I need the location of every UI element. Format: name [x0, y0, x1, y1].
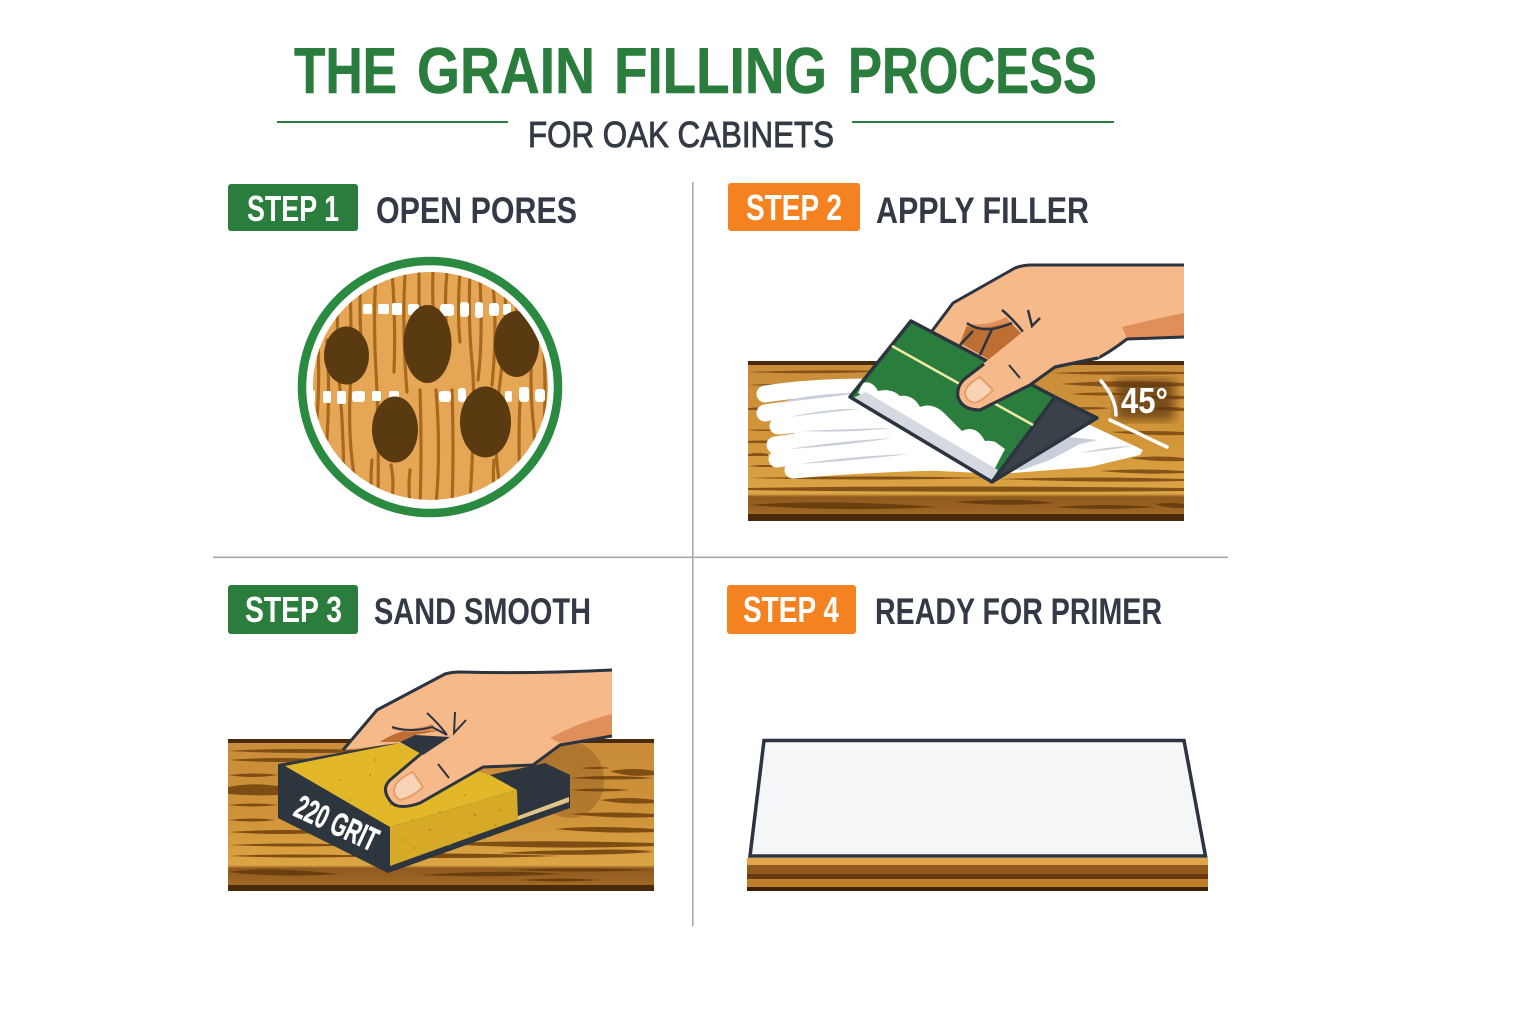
sanding block with 220 grit label	[278, 742, 570, 873]
step 1 heading: OPEN PORES	[376, 190, 577, 231]
pores	[324, 305, 539, 462]
step 2 badge	[728, 183, 860, 231]
wood board	[748, 361, 1184, 521]
title: GRAIN	[417, 34, 595, 107]
title: FILLING	[614, 34, 827, 107]
pore-line white dashes	[309, 302, 545, 404]
step 3 badge: STEP 3	[245, 589, 342, 630]
step 3 badge	[228, 585, 358, 634]
panel: step 4 ready for primer	[727, 585, 1208, 891]
panel: step 2 apply filler	[728, 183, 1184, 521]
panel: step 3 sand smooth	[228, 585, 654, 891]
step 1 badge: STEP 1	[247, 188, 339, 229]
step 1 badge	[228, 184, 358, 231]
step 3 heading: SAND SMOOTH	[374, 591, 591, 632]
filler smear	[765, 380, 1143, 474]
45 degree angle marker	[1101, 380, 1174, 447]
panel: step 1 open pores	[228, 184, 577, 520]
icon: magnified wood pores	[300, 260, 560, 520]
squeegee	[850, 321, 1097, 482]
thumb	[958, 320, 1110, 410]
step 2 heading: APPLY FILLER	[876, 190, 1089, 231]
step 4 badge: STEP 4	[743, 589, 839, 630]
title: PROCESS	[848, 34, 1097, 107]
subtitle with rules: FOR OAK CABINETS	[528, 114, 834, 155]
hand on block	[343, 670, 612, 806]
grit text: 220 GRIT	[289, 788, 384, 858]
step 4 badge	[727, 585, 856, 634]
hand behind squeegee	[932, 265, 1184, 410]
wood board	[228, 739, 654, 891]
title: THE	[294, 34, 397, 107]
45 degree angle marker: 45°	[1121, 380, 1168, 421]
step 4 heading: READY FOR PRIMER	[875, 591, 1162, 632]
primed panel	[747, 740, 1208, 891]
step 2 badge: STEP 2	[746, 187, 842, 228]
